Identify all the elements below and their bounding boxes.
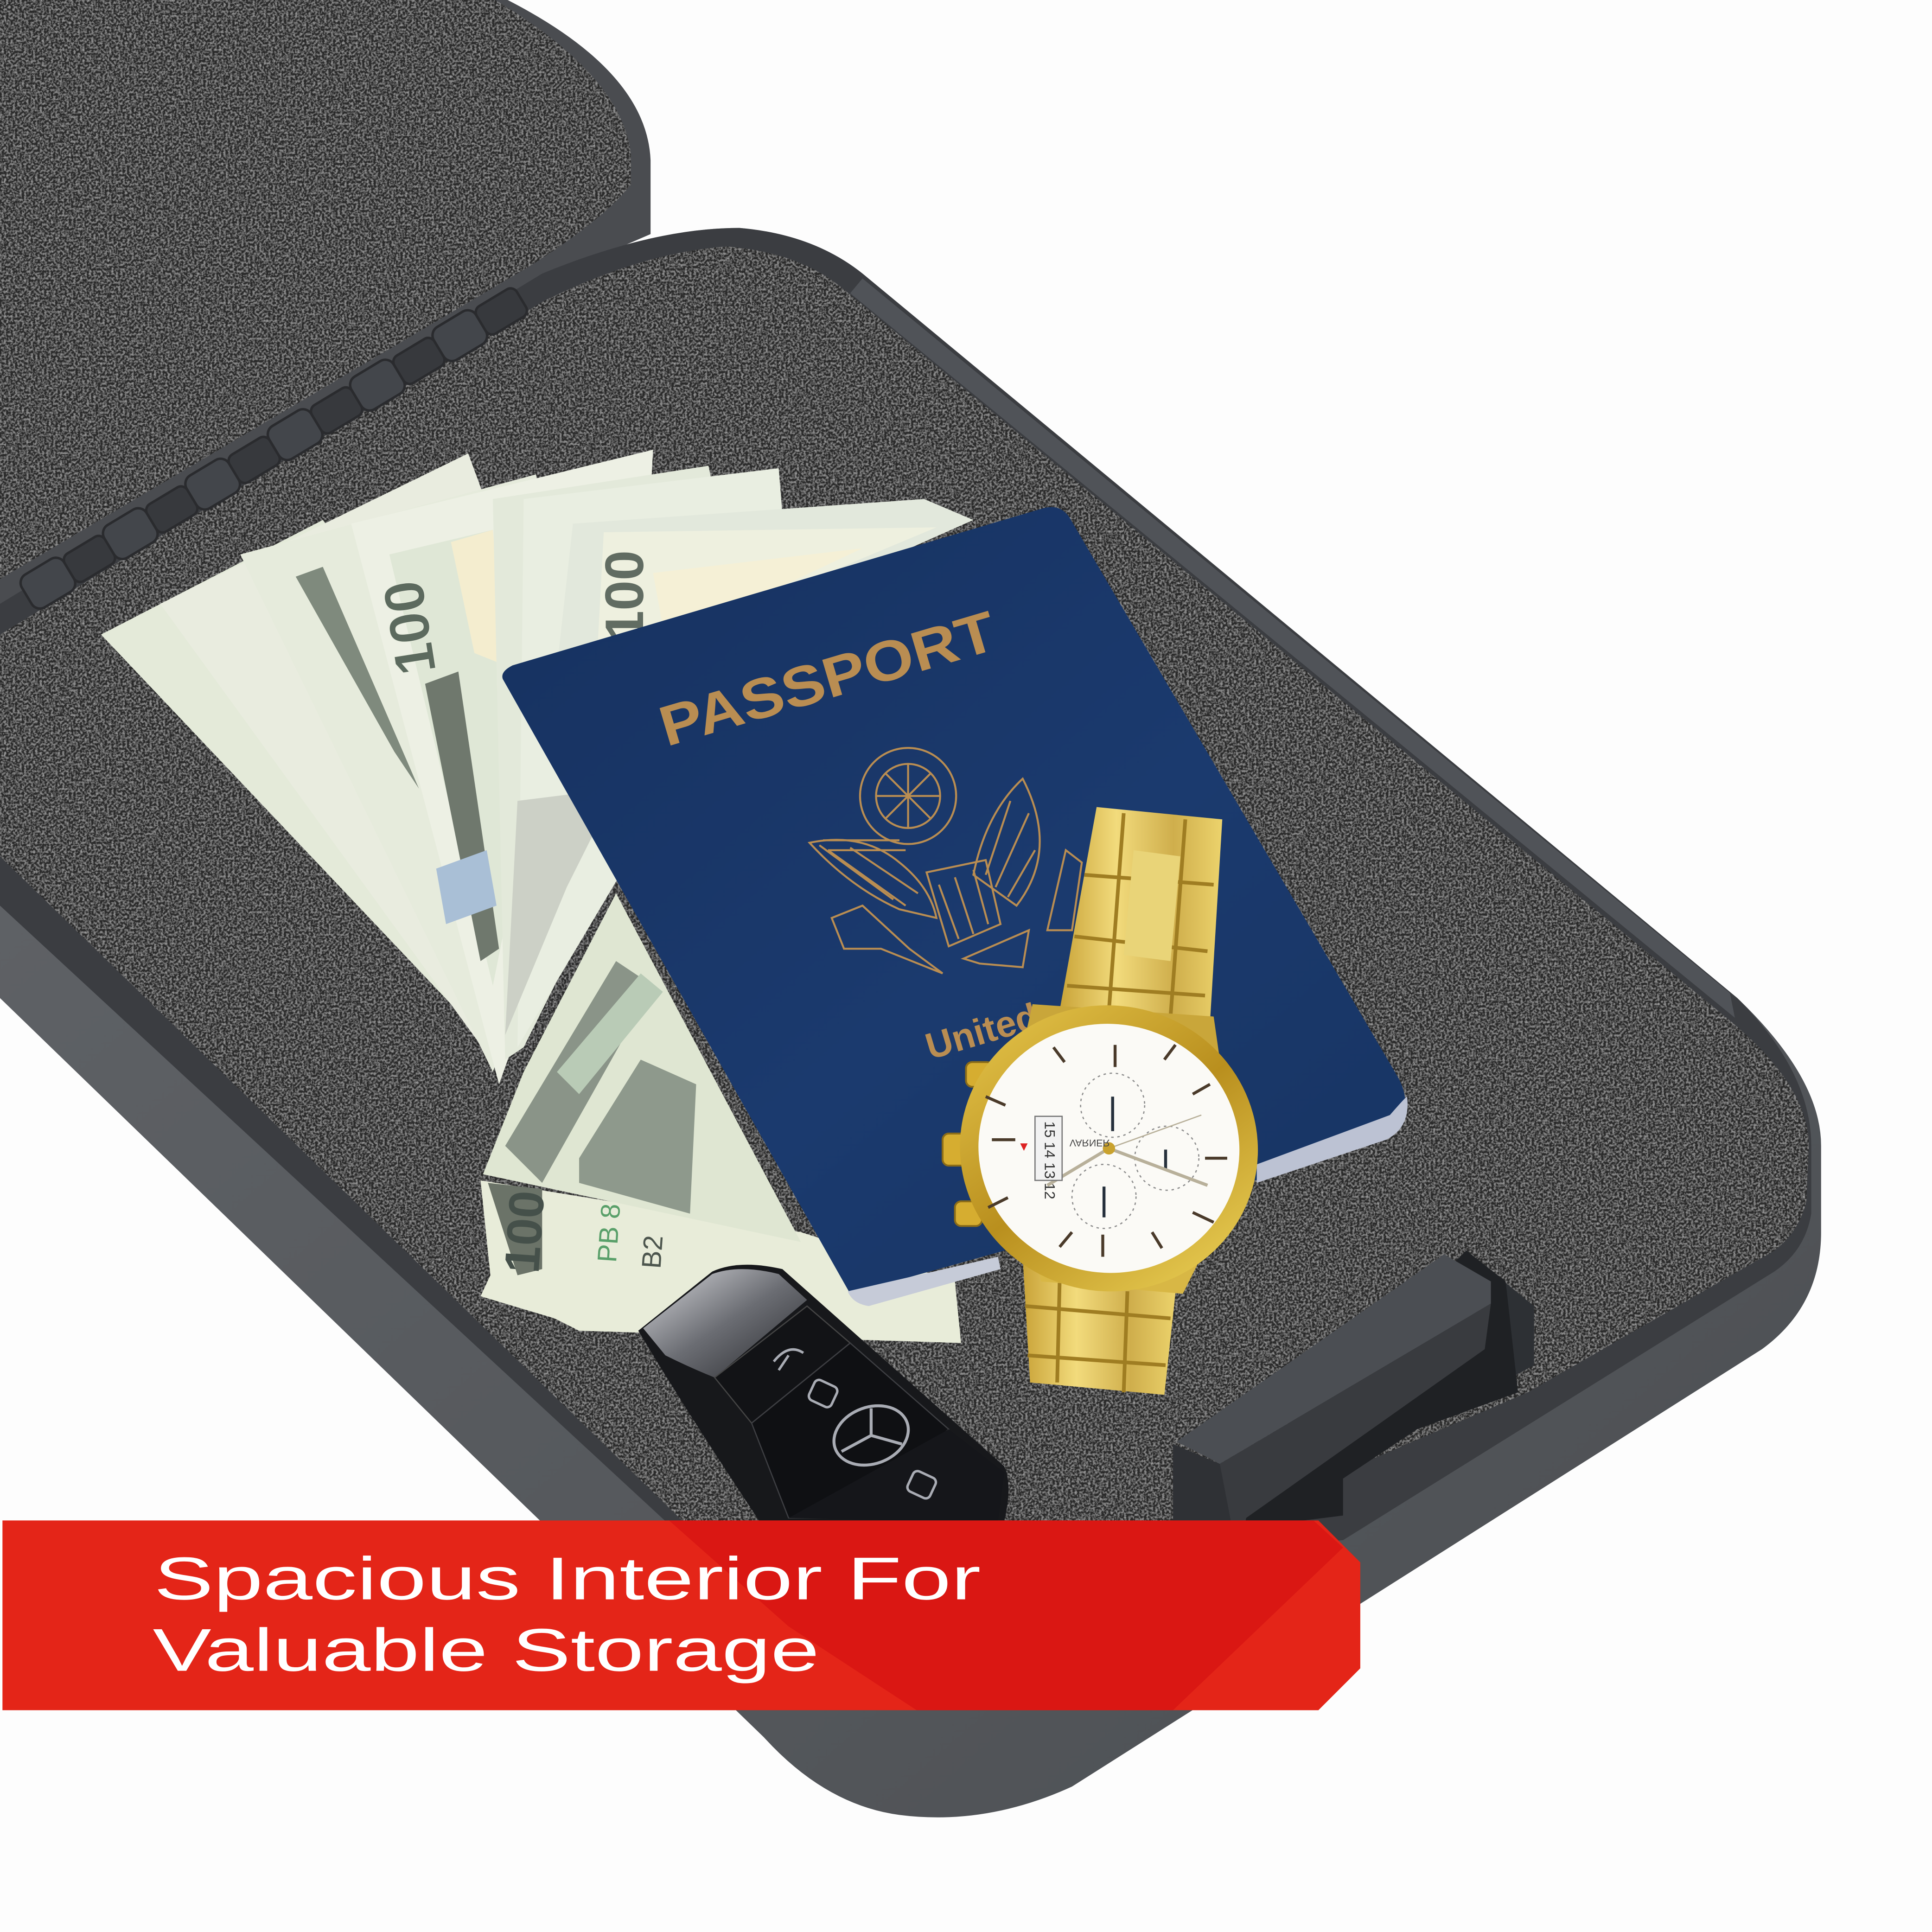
chronograph sub-dials [1072, 1073, 1199, 1229]
watch case [941, 986, 1276, 1311]
dial brand: VARNER [1070, 1137, 1110, 1148]
banknotes [101, 450, 973, 1343]
date window [1035, 1116, 1062, 1199]
watch hands [1047, 1115, 1207, 1186]
safe tray [0, 228, 1821, 1817]
upper bracelet [1059, 807, 1222, 1023]
serial print: PB 8 [592, 1203, 626, 1263]
passport pages [848, 1257, 1001, 1306]
date window: 15 14 13 12 [1042, 1121, 1058, 1199]
banknotes: 100 [494, 1189, 555, 1275]
banner [2, 1520, 1360, 1710]
passport title: PASSPORT [652, 599, 1003, 758]
passport seal [810, 748, 1082, 973]
banner title: Spacious Interior For [154, 1544, 981, 1612]
denomination print: 100 [370, 576, 448, 680]
hinge [17, 282, 531, 612]
dial [962, 1007, 1256, 1290]
wristwatch [941, 807, 1276, 1395]
banner title: Valuable Storage [153, 1616, 819, 1684]
car key fob [638, 1265, 1008, 1528]
banknotes: 100 [594, 550, 655, 641]
open safe lid [0, 0, 650, 610]
lower bracelet [1023, 1257, 1177, 1395]
banner tint over tray [669, 1520, 1343, 1710]
banknotes: B2 [637, 1234, 669, 1269]
lugs [1023, 1004, 1220, 1059]
foam insert [0, 247, 1809, 1540]
passport [502, 507, 1408, 1306]
lower folded banknote [480, 1180, 961, 1343]
crowns [943, 1062, 993, 1226]
passport country text: United [921, 995, 1043, 1067]
safe latch [1173, 1250, 1534, 1528]
key logo [774, 1350, 937, 1500]
